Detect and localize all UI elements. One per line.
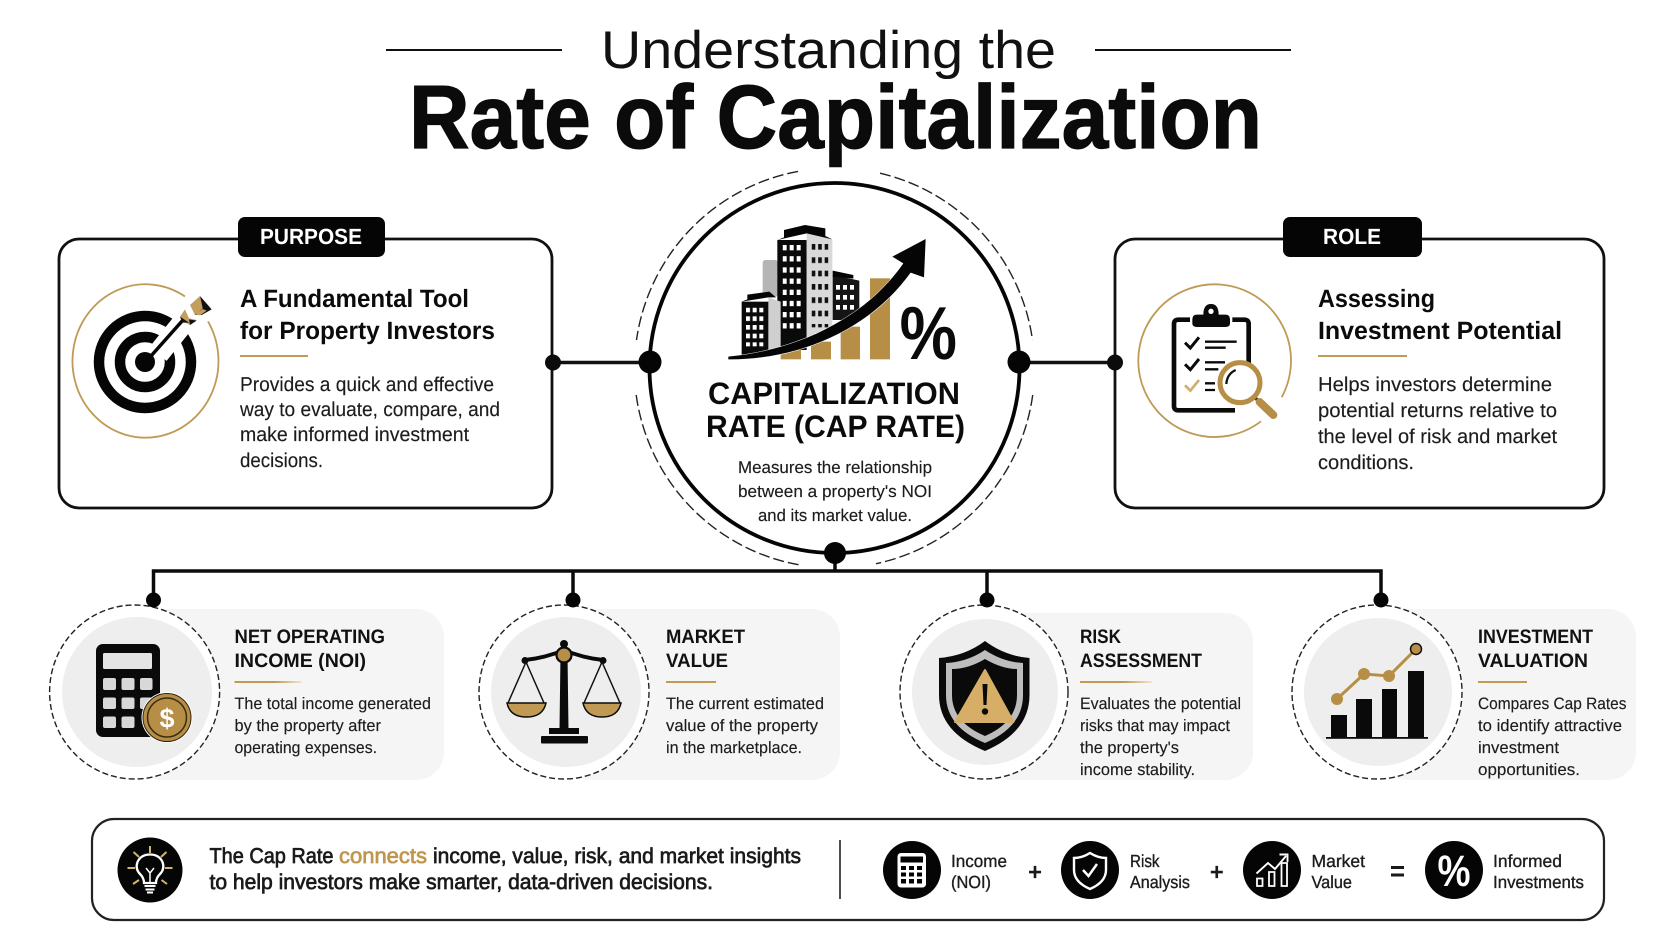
- text: noi description: The total income generated: [234, 695, 431, 713]
- operator: plus: +: [1210, 859, 1224, 886]
- badge: purpose: PURPOSE: [260, 224, 362, 249]
- icon: light bulb: [118, 838, 182, 902]
- icon: shield with warning triangle: [939, 641, 1030, 751]
- card: investment valuation: [1292, 592, 1636, 780]
- badge: role: [1283, 217, 1422, 257]
- heading: valuation: [1478, 626, 1593, 672]
- icon: risk shield: [1061, 841, 1119, 899]
- label: market value: Market: [1312, 851, 1365, 871]
- label: informed investments: Investments: [1493, 872, 1584, 892]
- icon: income calculator: [883, 841, 941, 899]
- icon: calculator with coin: [96, 644, 192, 743]
- label: informed investments: [1493, 851, 1584, 892]
- text: summary statement: income, value, risk, and market insights: [433, 844, 801, 868]
- text: hub description: between a property's NOI: [738, 482, 932, 501]
- connector: right panel to hub: [1019, 354, 1123, 370]
- connector: hub to four concepts: [154, 542, 1381, 600]
- heading: valuation: VALUATION: [1478, 650, 1588, 672]
- text: risk description: Evaluates the potential: [1080, 695, 1241, 713]
- text: risk description: [1080, 695, 1241, 779]
- heading: capitalization rate: [706, 376, 965, 444]
- heading: risk: ASSESSMENT: [1080, 650, 1202, 672]
- text: valuation description: Compares Cap Rates: [1478, 695, 1626, 713]
- text: purpose description: [239, 374, 500, 472]
- icon: percent: %: [1438, 847, 1470, 896]
- text: role description: Helps investors determine: [1318, 374, 1552, 396]
- text: role description: potential returns relative to: [1318, 400, 1557, 422]
- label: risk analysis: [1130, 851, 1190, 892]
- heading: noi: NET OPERATING: [234, 626, 385, 648]
- text: summary statement: connects: [339, 844, 427, 868]
- label: informed investments: Informed: [1493, 851, 1562, 871]
- text: market value description: value of the property: [666, 717, 819, 735]
- title: Rate of Capitalization: [409, 68, 1262, 168]
- text: market value description: in the marketplace.: [666, 739, 802, 757]
- text: purpose description: way to evaluate, compare, and: [239, 399, 500, 421]
- heading: role: Investment Potential: [1318, 317, 1562, 345]
- operator: equals: [1391, 866, 1404, 876]
- label: income: [951, 851, 1007, 892]
- text: risk description: income stability.: [1080, 761, 1195, 779]
- text: summary statement: [210, 844, 801, 894]
- badge: role: ROLE: [1323, 224, 1381, 249]
- text: market value description: The current estimated: [666, 695, 824, 713]
- text: role description: the level of risk and market: [1318, 426, 1557, 448]
- panel: central hub circle: [636, 171, 1033, 565]
- heading: purpose: [240, 285, 495, 345]
- text: purpose description: make informed investment: [240, 424, 469, 446]
- title: [386, 21, 1291, 168]
- panel: purpose: [59, 217, 552, 508]
- text: hub description: and its market value.: [758, 506, 912, 525]
- label: market value: [1312, 851, 1365, 892]
- heading: purpose: for Property Investors: [240, 317, 495, 345]
- icon: target with arrow: [72, 284, 218, 438]
- icon: bar chart with gold trend line: [1326, 644, 1428, 739]
- operator: plus: +: [1028, 859, 1042, 886]
- text: noi description: operating expenses.: [234, 739, 377, 757]
- text: purpose description: decisions.: [240, 450, 323, 472]
- icon: market chart: [1243, 841, 1301, 899]
- label: income: Income: [951, 851, 1007, 871]
- text: hub description: Measures the relationship: [738, 458, 932, 477]
- text: role description: conditions.: [1318, 452, 1414, 474]
- text: risk description: risks that may impact: [1080, 717, 1230, 735]
- label: risk analysis: Risk: [1130, 851, 1160, 871]
- text: purpose description: Provides a quick and effective: [240, 374, 494, 396]
- card: market value: [479, 592, 840, 780]
- icon: buildings, gold bars, rising arrow and percent: [728, 225, 957, 375]
- title: Understanding the: [601, 21, 1056, 80]
- label: market value: Value: [1312, 872, 1352, 892]
- icon: balance scale: [507, 640, 621, 744]
- heading: market value: MARKET: [666, 626, 745, 648]
- label: income: (NOI): [951, 872, 991, 892]
- heading: noi: [234, 626, 385, 672]
- text: market value description: [666, 695, 824, 757]
- card: risk assessment: [900, 592, 1253, 780]
- label: risk analysis: Analysis: [1130, 872, 1190, 892]
- heading: role: Assessing: [1318, 285, 1435, 313]
- panel: bottom summary bar: [92, 819, 1604, 920]
- heading: market value: [666, 626, 745, 672]
- text: hub description: [738, 458, 932, 525]
- text: summary statement: to help investors make smarter, data-driven decisions.: [210, 870, 713, 894]
- panel: role: [1115, 217, 1604, 508]
- icon: calculator with coin: $: [159, 704, 175, 734]
- text: valuation description: opportunities.: [1478, 761, 1580, 779]
- badge: purpose: [238, 217, 385, 257]
- text: valuation description: [1478, 695, 1626, 779]
- text: risk description: the property's: [1080, 739, 1179, 757]
- icon: clipboard with magnifier: [1138, 284, 1291, 437]
- text: noi description: [234, 695, 431, 757]
- text: summary statement: The Cap Rate: [210, 844, 334, 868]
- card: net operating income: [50, 592, 444, 780]
- heading: risk: RISK: [1080, 626, 1121, 648]
- connector: left panel to hub: [545, 354, 650, 370]
- text: role description: [1318, 374, 1557, 474]
- heading: capitalization rate: CAPITALIZATION: [708, 376, 960, 411]
- heading: risk: [1080, 626, 1202, 672]
- heading: purpose: A Fundamental Tool: [240, 285, 469, 313]
- text: valuation description: investment: [1478, 739, 1559, 757]
- text: valuation description: to identify attractive: [1478, 717, 1622, 735]
- heading: market value: VALUE: [666, 650, 728, 672]
- heading: noi: INCOME (NOI): [234, 650, 366, 672]
- heading: valuation: INVESTMENT: [1478, 626, 1593, 648]
- icon: percent: [1425, 841, 1483, 899]
- heading: role: [1318, 285, 1562, 345]
- text: noi description: by the property after: [234, 717, 381, 735]
- icon: buildings, gold bars, rising arrow and percent: %: [900, 291, 957, 375]
- heading: capitalization rate: RATE (CAP RATE): [706, 409, 965, 444]
